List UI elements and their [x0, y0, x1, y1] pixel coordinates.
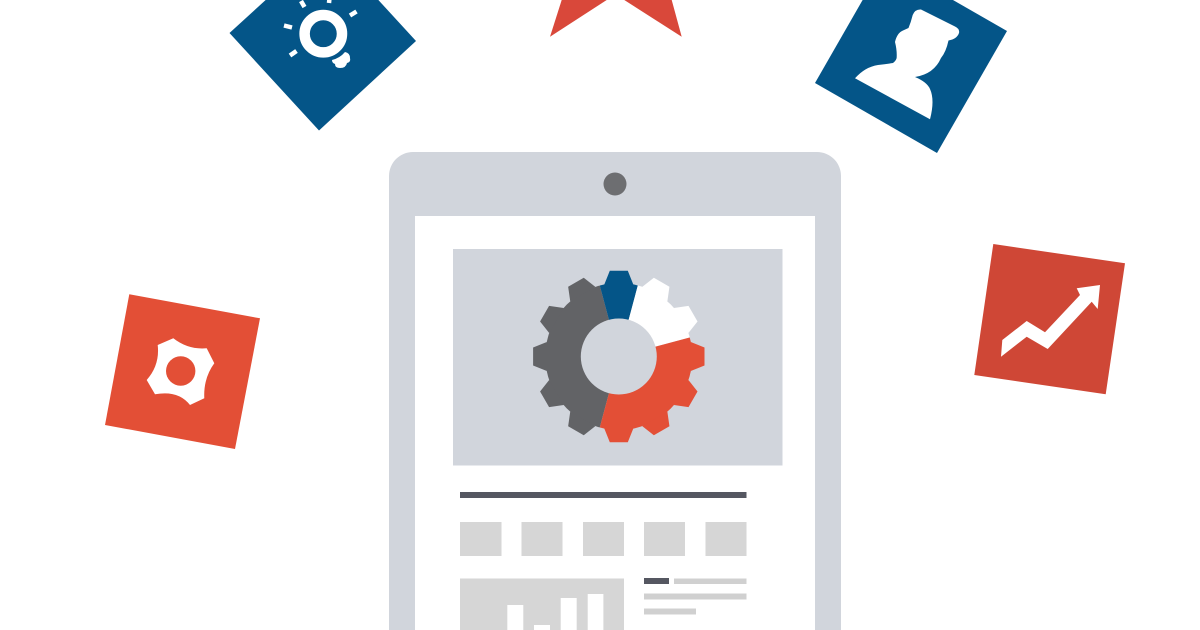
blue square: [815, 0, 1007, 153]
gear segment: white: [628, 278, 698, 346]
icon: person tile: [815, 0, 1007, 153]
gear segment: gray: [533, 278, 609, 436]
bulb base: [332, 52, 350, 68]
red square: [105, 294, 260, 449]
tablet screen: [415, 216, 815, 630]
chart bars: [507, 594, 603, 630]
growth arrow: [1001, 285, 1100, 357]
icon: growth arrow tile: [974, 244, 1125, 394]
gear hole: [581, 318, 657, 394]
segmented gear chart: [533, 271, 704, 442]
icon: lightbulb tile: [230, 0, 416, 130]
cog shape: [147, 338, 214, 405]
hero panel with gear: [453, 249, 782, 466]
row of five tiles: [460, 522, 746, 556]
icon: red star: [550, 0, 607, 37]
red square: [974, 244, 1125, 394]
person silhouette: [855, 9, 959, 119]
gear segment: red: [600, 338, 704, 442]
bulb ring: [305, 15, 342, 52]
mini bar chart: [460, 578, 624, 630]
hero panel background: [453, 249, 782, 466]
blue diamond: [230, 0, 416, 130]
text placeholder lines: [644, 578, 746, 614]
tablet device: [389, 152, 841, 630]
gear segment: blue: [600, 270, 638, 320]
cog hole: [166, 356, 195, 386]
icon: cog tile: [105, 294, 260, 449]
bulb rays: [284, 0, 356, 56]
heading bar: [460, 492, 746, 498]
tablet body: [389, 152, 841, 630]
icon: red star right leg: [624, 0, 682, 37]
tablet camera: [604, 172, 626, 196]
chart background: [460, 578, 624, 630]
